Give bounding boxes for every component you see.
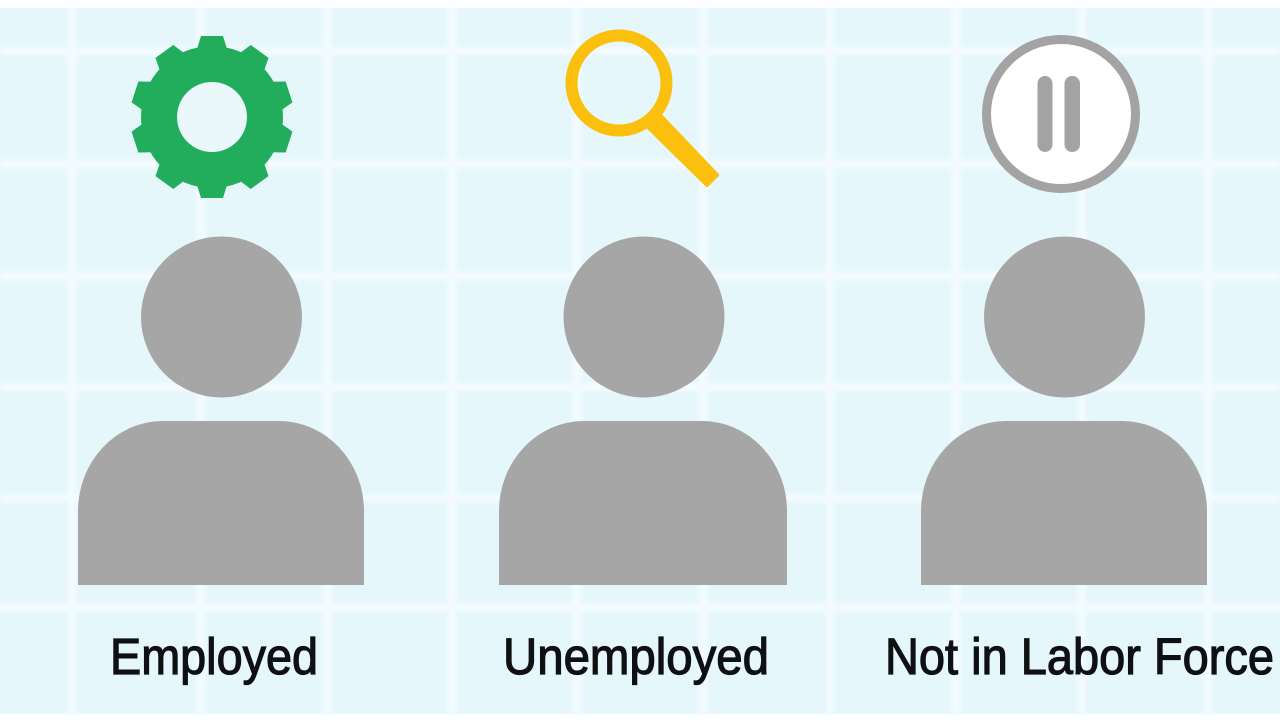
column: Employed — [78, 36, 364, 685]
column: Not in Labor Force — [885, 40, 1274, 685]
icon: person, employed — [78, 236, 364, 585]
label: Unemployed: Unemployed — [503, 628, 769, 685]
label: Employed: Employed — [110, 628, 318, 685]
icon: grey pause button — [986, 40, 1136, 188]
icon: person, not in labor force — [921, 236, 1207, 585]
column: Unemployed — [499, 36, 787, 685]
icon: yellow magnifying glass — [572, 36, 717, 185]
icon: green gear — [130, 36, 294, 198]
icon: person, unemployed — [499, 236, 787, 585]
